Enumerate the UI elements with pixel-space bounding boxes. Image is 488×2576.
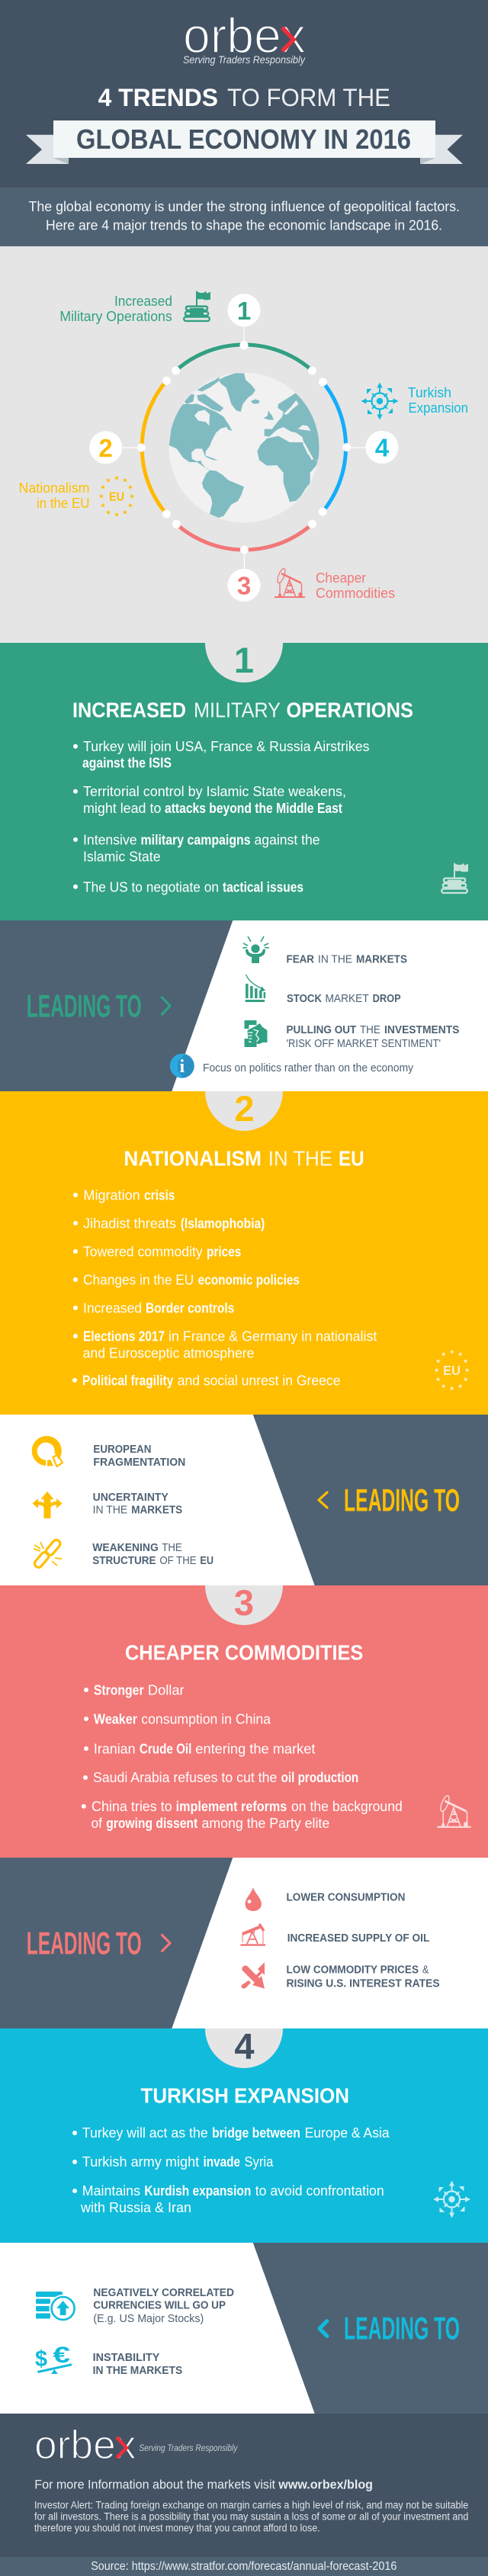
bullet list: Turkey will act as the <box>82 2125 208 2141</box>
panel: trend 4 <box>0 2025 488 2243</box>
text: weakening the structure: OF THE <box>159 1555 197 1567</box>
text: low commodity prices: RISING U.S. INTEREST RATES <box>287 1978 440 1990</box>
icon: tank <box>184 291 210 321</box>
bullet list: might lead to <box>83 800 161 816</box>
panel: trend 3 <box>0 1582 488 1858</box>
bullet list: Increased <box>83 1299 142 1315</box>
bullet list: and social unrest in Greece <box>178 1372 340 1388</box>
icon: info: i <box>179 1057 185 1077</box>
title ribbon <box>26 120 463 164</box>
text: pulling out the investments: PULLING OUT <box>287 1024 356 1036</box>
text: weakening the structure: EU <box>200 1555 214 1567</box>
heading: TURKISH EXPANSION <box>140 2083 349 2107</box>
text: negatively correlated currencies: NEGATIVELY CORRELATED <box>93 2287 234 2299</box>
icon: falling chart <box>246 975 265 1002</box>
leading to label: LEADING TO <box>27 988 142 1023</box>
text: fear in the markets: IN THE <box>318 954 352 966</box>
icon: eu stars <box>99 476 134 516</box>
ring: blue arc <box>323 382 346 512</box>
text: european fragmentation <box>93 1444 185 1469</box>
label: nationalism in the eu: in the EU <box>37 496 90 511</box>
bullet list: Intensive <box>83 831 137 847</box>
bullet list: Border controls <box>146 1299 234 1315</box>
heading: OPERATIONS <box>287 699 413 722</box>
heading: NATIONALISM <box>124 1147 262 1171</box>
text: uncertainty in the markets: IN THE <box>93 1505 128 1517</box>
badge 4: 4 <box>375 433 390 462</box>
text: european fragmentation: EUROPEAN <box>93 1444 151 1456</box>
bullet list: oil production <box>281 1769 358 1785</box>
ring: red arc <box>176 524 312 550</box>
bullet list: Syria <box>244 2154 274 2170</box>
bullet list: attacks beyond the Middle East <box>165 800 342 816</box>
bullet list: Stronger <box>94 1681 144 1698</box>
icon: broken chain <box>33 1538 62 1569</box>
icon: broken ring <box>32 1436 63 1466</box>
badge 3 <box>227 569 261 602</box>
bullet list: Weaker <box>94 1710 137 1726</box>
icon: oil pump faded <box>438 1794 471 1827</box>
text: fear in the markets: MARKETS <box>356 954 407 966</box>
bullet list: Maintains <box>82 2183 140 2199</box>
footer logo <box>34 2423 238 2468</box>
number tab 3: 3 <box>234 1582 254 1623</box>
text: fear in the markets: FEAR <box>287 954 314 966</box>
bullet list: Jihadist threats <box>83 1215 176 1231</box>
panel: trend 2 <box>0 1088 488 1415</box>
bullet list: Changes in the EU <box>83 1271 194 1287</box>
label: increased military operations: Military Operations <box>59 309 172 324</box>
heading: EU <box>339 1147 364 1171</box>
text: pulling out the investments: INVESTMENTS <box>384 1024 460 1036</box>
label: cheaper commodities: Commodities <box>316 586 395 601</box>
badge 2 <box>89 431 122 464</box>
bullet list: Migration <box>83 1187 140 1203</box>
icon: compass <box>361 383 398 419</box>
text: stock market drop: DROP <box>373 993 401 1005</box>
label: turkish expansion: Expansion <box>409 400 468 416</box>
icon: currency balance: € <box>53 2343 70 2368</box>
icon: oil drop <box>246 1887 262 1911</box>
bullet list: Islamic State <box>83 848 161 864</box>
icon: compass faded <box>433 2181 470 2218</box>
badge 2: 2 <box>98 434 113 462</box>
investor alert: for all investors. There is a possibility that you may sustain a loss of some or all of your investment and <box>34 2510 468 2522</box>
label: turkish expansion <box>408 385 468 416</box>
bullet list: military campaigns <box>140 831 251 847</box>
label: increased military operations <box>59 294 172 324</box>
bullet list: Europe & Asia <box>305 2125 390 2141</box>
ring connectors and dots <box>123 326 366 569</box>
number tab 2 <box>205 1088 283 1131</box>
leading to label <box>319 2310 460 2346</box>
panel: leading to 4 <box>0 2243 488 2414</box>
panel: source: Source: https://www.stratfor.com/forecast/annual-forecast-2016 <box>91 2560 397 2573</box>
ring: yellow arc <box>142 381 166 514</box>
heading: CHEAPER COMMODITIES <box>125 1641 363 1665</box>
bullet list: Towered commodity <box>83 1243 203 1259</box>
text: pulling out the investments <box>287 1024 460 1050</box>
footer logo: Serving Traders Responsibly <box>139 2443 238 2453</box>
text: weakening the structure: WEAKENING <box>92 1542 159 1554</box>
badge 4 <box>366 431 398 464</box>
bullet list: against the ISIS <box>82 755 172 771</box>
panel: intro: The global economy is under the strong influence of geopolitical factors. <box>29 198 460 214</box>
bullet list: Territorial control by Islamic State weakens, <box>83 783 346 799</box>
panel: header <box>0 0 488 188</box>
bullet list: invade <box>203 2154 240 2170</box>
text: low commodity prices: LOW COMMODITY PRICES <box>287 1964 419 1977</box>
text: european fragmentation: FRAGMENTATION <box>93 1457 185 1469</box>
logo: Serving Traders Responsibly <box>183 54 306 66</box>
more information line: For more Information about the markets visit <box>34 2478 275 2491</box>
bullet list: China tries to <box>92 1798 172 1814</box>
text: low commodity prices: & <box>422 1964 429 1977</box>
panel: leading to 1 <box>0 920 488 1091</box>
text: uncertainty in the markets <box>93 1492 182 1517</box>
bullet list: (Islamophobia) <box>181 1215 265 1231</box>
panel: intro <box>0 188 488 246</box>
bullet list: growing dissent <box>106 1815 197 1831</box>
bullet list <box>73 738 369 895</box>
bullet list <box>82 1681 403 1831</box>
bullet list: Dollar <box>148 1681 185 1698</box>
heading: IN THE <box>268 1147 332 1171</box>
bullet list: in France & Germany in nationalist <box>169 1328 377 1344</box>
panel: footer <box>0 2414 488 2557</box>
label: nationalism in the eu <box>18 480 90 511</box>
icon: oil pump <box>274 567 305 597</box>
bullet list <box>72 1187 377 1388</box>
bullet list: implement reforms <box>176 1798 287 1814</box>
text: pulling out the investments: THE <box>360 1024 380 1036</box>
text: stock market drop: STOCK <box>287 993 322 1005</box>
label: turkish expansion: Turkish <box>408 385 451 400</box>
bullet list: Turkish army might <box>82 2154 199 2170</box>
bullet list: to avoid confrontation <box>255 2183 384 2199</box>
logo: orbex <box>183 8 306 63</box>
bullet list: Saudi Arabia refuses to cut the <box>93 1769 277 1785</box>
number tab 3 <box>205 1582 283 1625</box>
badge 1 <box>227 294 261 326</box>
bullet list: entering the market <box>195 1740 316 1756</box>
panel: leading to 3 <box>0 1858 488 2028</box>
bullet list: and Eurosceptic atmosphere <box>83 1344 254 1360</box>
bullet list: economic policies <box>198 1271 300 1287</box>
text: increased supply of oil: INCREASED SUPPLY OF OIL <box>287 1932 429 1945</box>
text: uncertainty in the markets: MARKETS <box>131 1505 182 1517</box>
icon: fear <box>242 936 269 963</box>
icon: eu stars: EU <box>109 491 124 503</box>
icon: info <box>170 1054 194 1078</box>
icon: pumpjack <box>241 1924 265 1945</box>
text: instability in the markets: IN THE MARKETS <box>93 2365 183 2377</box>
callout: focus on politics: Focus on politics rather than on the economy <box>203 1062 414 1074</box>
icon: crossing arrows <box>241 1962 265 1989</box>
title ribbon: GLOBAL ECONOMY IN 2016 <box>76 124 411 155</box>
footer logo: orbex <box>34 2423 136 2468</box>
label: cheaper commodities <box>316 570 395 601</box>
investor alert: Investor Alert: Trading foreign exchange on margin carries a high level of risk, and may not be suitable <box>34 2499 468 2510</box>
text: low commodity prices <box>287 1964 440 1990</box>
number tab 2: 2 <box>234 1088 255 1129</box>
text: stock market drop: MARKET <box>325 993 369 1005</box>
globe <box>169 372 322 523</box>
icon: currency balance <box>35 2343 72 2374</box>
text: negatively correlated currencies: (E.g. US Major Stocks) <box>93 2312 204 2325</box>
text: weakening the structure: STRUCTURE <box>92 1555 156 1567</box>
title line 1: TO FORM THE <box>227 84 390 111</box>
ring: green arc <box>176 345 312 371</box>
label: increased military operations: Increased <box>114 294 172 309</box>
bullet list: consumption in China <box>141 1710 271 1726</box>
text: instability in the markets <box>93 2352 183 2377</box>
icon: crossroad arrows <box>32 1492 63 1518</box>
bullet list: on the background <box>291 1798 403 1814</box>
bullet list: tactical issues <box>223 878 303 895</box>
text: uncertainty in the markets: UNCERTAINTY <box>93 1492 169 1504</box>
bullet list: bridge between <box>212 2125 300 2141</box>
icon: hand pulling out <box>244 1020 267 1047</box>
icon: coins with up arrow <box>36 2292 77 2322</box>
panel: intro: Here are 4 major trends to shape the economic landscape in 2016. <box>46 217 442 233</box>
heading: MILITARY <box>194 699 281 722</box>
bullet list: with Russia & Iran <box>80 2199 191 2215</box>
icon: currency balance: $ <box>35 2346 47 2372</box>
bullet list: against the <box>255 831 320 847</box>
text: lower consumption: LOWER CONSUMPTION <box>287 1892 405 1904</box>
bullet list <box>72 2125 390 2215</box>
more information line: www.orbex/blog <box>278 2478 373 2491</box>
number tab 4: 4 <box>234 2025 255 2066</box>
number tab 1 <box>205 640 283 683</box>
bullet list: Elections 2017 <box>83 1328 165 1344</box>
bullet list: Political fragility <box>82 1372 174 1388</box>
bullet list: Iranian <box>94 1740 136 1756</box>
bullet list: Crude Oil <box>140 1740 191 1756</box>
badge 1: 1 <box>237 297 251 325</box>
investor alert: therefore you should not invest money that you cannot afford to lose. <box>34 2522 320 2533</box>
panel: trends overview <box>0 246 488 643</box>
bullet list: crisis <box>144 1187 175 1203</box>
label: nationalism in the eu: Nationalism <box>18 480 90 496</box>
text: weakening the structure <box>92 1542 214 1567</box>
bullet list: The US to negotiate on <box>83 878 219 895</box>
bullet list: among the Party elite <box>201 1815 329 1831</box>
text: instability in the markets: INSTABILITY <box>93 2352 160 2364</box>
text: negatively correlated currencies <box>93 2287 234 2325</box>
bullet list: Kurdish expansion <box>144 2183 251 2199</box>
bullet list: Turkey will join USA, France & Russia Airstrikes <box>83 738 369 754</box>
title line 1: 4 TRENDS <box>98 84 218 111</box>
icon: tank faded <box>441 863 468 893</box>
panel: trend 1 <box>0 640 488 920</box>
badge 3: 3 <box>237 572 251 599</box>
label: cheaper commodities: Cheaper <box>316 570 366 586</box>
investor alert <box>34 2499 468 2533</box>
leading to label <box>319 1482 460 1518</box>
text: pulling out the investments: 'RISK OFF MARKET SENTIMENT' <box>287 1038 441 1050</box>
text: negatively correlated currencies: CURRENCIES WILL GO UP <box>93 2300 226 2312</box>
number tab 1: 1 <box>234 640 254 680</box>
heading: INCREASED <box>72 699 186 722</box>
bullet list: of <box>92 1815 103 1831</box>
panel: source <box>0 2557 488 2576</box>
text: weakening the structure: THE <box>162 1542 182 1554</box>
icon: eu stars faded <box>435 1350 470 1390</box>
panel: leading to 2 <box>0 1415 488 1585</box>
bullet list: prices <box>207 1243 241 1259</box>
icon: eu stars faded: EU <box>443 1363 461 1378</box>
leading to label: LEADING TO <box>27 1926 142 1961</box>
number tab 4 <box>205 2025 283 2068</box>
